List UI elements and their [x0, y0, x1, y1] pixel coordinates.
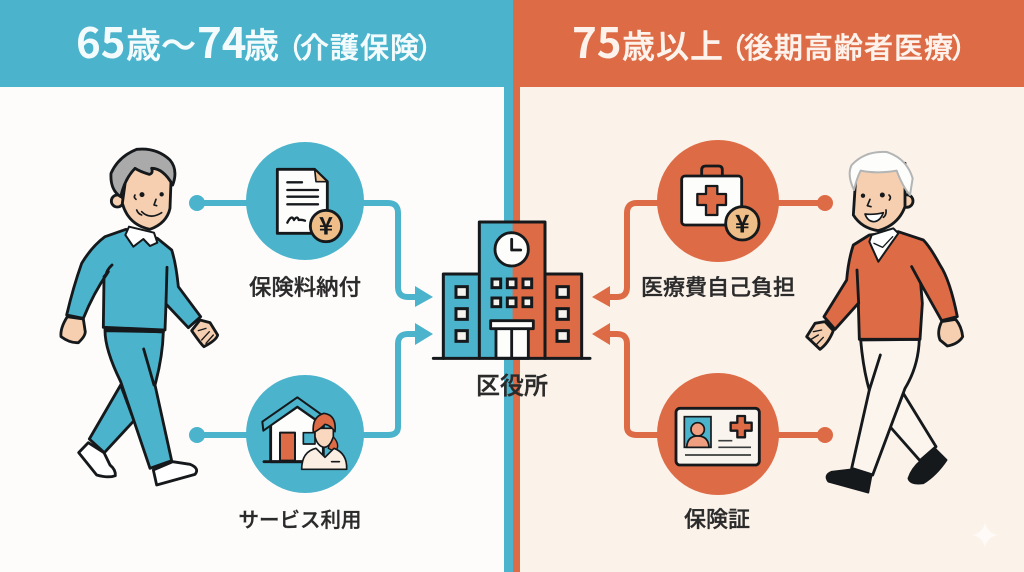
header band: right [513, 0, 1024, 87]
sweater [824, 232, 957, 339]
heading: 75歳以上 (後期高齢者医療): 齢 [834, 25, 863, 67]
back leg [89, 385, 134, 453]
medical kit [702, 166, 722, 176]
yen coin [310, 210, 342, 242]
heading: 65歳～74歳 (介護保険): 険 [390, 25, 419, 67]
icon circle: medical kit and yen coin [657, 140, 779, 262]
hair [111, 149, 175, 197]
person: older man in orange walking [807, 152, 963, 493]
back shoe [908, 448, 947, 484]
connector: 保険料納付 to 区役所 [189, 195, 433, 307]
heading: 75歳以上 (後期高齢者医療): 75 [572, 10, 622, 71]
heading: 65歳～74歳 (介護保険): 歳 [126, 18, 161, 69]
cross [731, 416, 752, 437]
front leg [105, 331, 172, 468]
heading: 75歳以上 (後期高齢者医療): 以 [656, 20, 689, 68]
heading: 65歳～74歳 (介護保険): 保 [360, 25, 389, 67]
heading: 65歳～74歳 (介護保険): ～ [161, 18, 196, 69]
card [676, 408, 759, 465]
person: younger man in blue walking [61, 149, 218, 485]
heading: 75歳以上 (後期高齢者医療): 療 [924, 25, 953, 67]
label: 区役所: 区役所 [476, 366, 548, 401]
label: 保険料納付: 保険料納付 [249, 270, 361, 302]
right hand [192, 320, 218, 347]
heading: 75歳以上 (後期高齢者医療): ） [951, 27, 979, 67]
label: 医療費自己負担: 医療費自己負担 [641, 270, 795, 302]
right wing [545, 274, 582, 358]
watermark sparkle [972, 522, 998, 548]
front leg [852, 339, 919, 475]
icon circle: insurance card [657, 373, 779, 495]
label: サービス利用: サービス利用 [238, 503, 362, 533]
left panel background [0, 87, 504, 572]
icon circle: house and care worker [246, 375, 364, 493]
ear [900, 195, 913, 207]
face [853, 163, 905, 231]
heading: 75歳以上 (後期高齢者医療): 上 [690, 20, 723, 68]
heading: 65歳～74歳 (介護保険): ） [417, 27, 445, 67]
heading: 65歳～74歳 (介護保険): 護 [330, 25, 359, 67]
smile [865, 213, 883, 222]
tower left half [479, 222, 513, 358]
collar [125, 227, 157, 247]
center divider: blue [504, 87, 513, 572]
house [271, 407, 323, 462]
clock [495, 233, 528, 266]
left hand [61, 317, 85, 343]
collar and shirt [869, 228, 898, 262]
front shoe [153, 462, 197, 485]
label: 保険証: 保険証 [684, 502, 750, 534]
left wing [443, 274, 479, 358]
front shoe [826, 469, 872, 493]
document [277, 169, 327, 233]
heading: 65歳～74歳 (介護保険): 歳 [244, 18, 279, 69]
icon: city hall building [433, 222, 590, 358]
face [122, 160, 172, 229]
entrance [496, 328, 528, 358]
connector: 保険証 to 区役所 [592, 323, 833, 443]
icon circle: medical kit and yen coin: ¥ [735, 204, 750, 240]
heading: 75歳以上 (後期高齢者医療): 高 [804, 25, 833, 67]
heading: 75歳以上 (後期高齢者医療): 期 [774, 25, 803, 67]
heading: 75歳以上 (後期高齢者医療): 歳 [622, 20, 655, 68]
hair [850, 152, 913, 195]
sweater [67, 229, 201, 330]
yen coin [726, 207, 759, 240]
left hand [807, 322, 833, 349]
heading: 65歳～74歳 (介護保険): （ [275, 27, 303, 67]
tower right half [513, 222, 545, 358]
icon circle: document and yen coin: ¥ [319, 207, 333, 242]
heading: 65歳～74歳 (介護保険): 介 [300, 25, 329, 67]
eyes [139, 192, 144, 197]
connector: サービス利用 to 区役所 [189, 323, 433, 443]
heading: 75歳以上 (後期高齢者医療): （ [718, 27, 746, 67]
heading: 65歳～74歳 (介護保険): 65 [76, 10, 126, 71]
smile [134, 195, 162, 216]
heading: 65歳～74歳 (介護保険): 74 [197, 10, 247, 71]
windows [456, 279, 568, 341]
center divider: orange [513, 87, 520, 572]
ear [111, 195, 123, 207]
header band: left [0, 0, 513, 87]
heading: 75歳以上 (後期高齢者医療): 後 [744, 25, 773, 67]
back shoe [79, 443, 115, 477]
back leg [890, 393, 936, 461]
right panel background [520, 87, 1024, 572]
care worker [328, 435, 338, 452]
icon circle: document and yen coin [246, 142, 364, 260]
photo [684, 417, 711, 447]
right hand [939, 319, 963, 346]
heading: 75歳以上 (後期高齢者医療): 者 [864, 25, 893, 67]
heading: 75歳以上 (後期高齢者医療): 医 [894, 25, 923, 67]
eyes [861, 193, 865, 198]
connector: 医療費自己負担 to 区役所 [592, 195, 833, 307]
